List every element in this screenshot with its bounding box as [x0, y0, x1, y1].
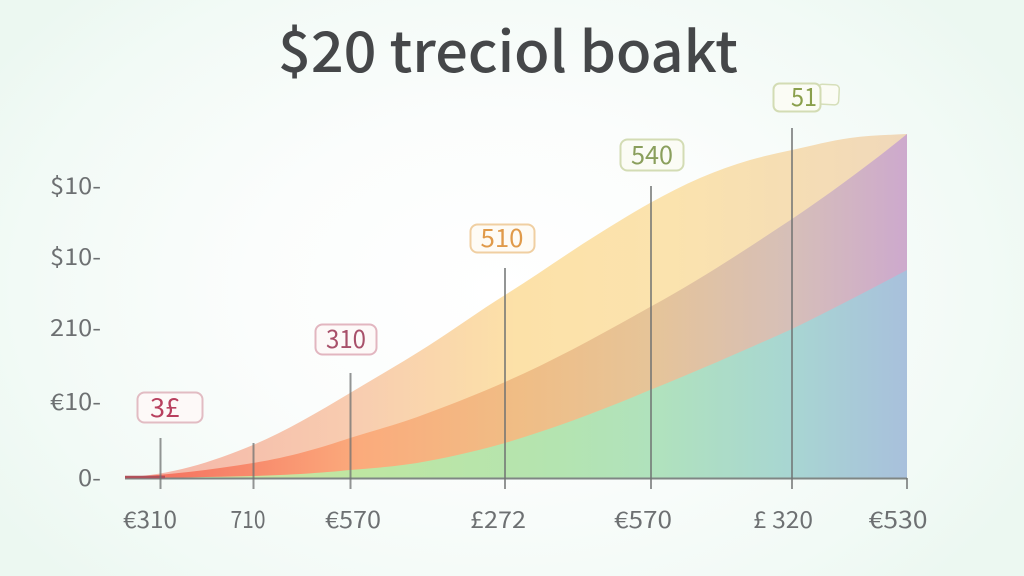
y axis labels: $10-: [50, 238, 101, 272]
callout: 510: 510: [480, 219, 524, 255]
y axis labels: $10-: [50, 167, 101, 201]
callout: 540: 540: [631, 136, 673, 172]
x axis labels: £272: [470, 501, 526, 535]
callout: 310: [316, 320, 376, 356]
x axis labels: 710: [230, 500, 266, 535]
x axis labels: [123, 500, 928, 535]
x axis labels: £ 320: [753, 501, 813, 535]
area chart: [125, 134, 907, 478]
callout: 540: [620, 136, 684, 172]
vertical marker lines: [160, 128, 907, 489]
baseline axis: [125, 478, 907, 480]
y axis labels: 0-: [78, 459, 101, 493]
x axis labels: €570: [614, 501, 672, 535]
start marker on baseline: [125, 476, 165, 478]
callout: 3£: [138, 388, 202, 425]
area: top band: [125, 134, 907, 478]
y axis labels: €10-: [50, 383, 101, 417]
y axis labels: 210-: [50, 309, 101, 343]
callout: 310: 310: [326, 320, 366, 356]
area: middle band: [125, 134, 907, 478]
callout: 51: [774, 78, 839, 114]
callout: 510: [470, 219, 534, 255]
callout: 3£: 3£: [150, 388, 180, 425]
area: lower band: [125, 270, 907, 478]
x axis labels: €310: [123, 501, 177, 535]
y axis labels: [50, 167, 101, 493]
x axis labels: €570: [325, 501, 381, 535]
x axis labels: €530: [868, 501, 928, 535]
callout: 51: 51: [791, 78, 817, 114]
title: $20 treciol boakt: [278, 8, 738, 89]
